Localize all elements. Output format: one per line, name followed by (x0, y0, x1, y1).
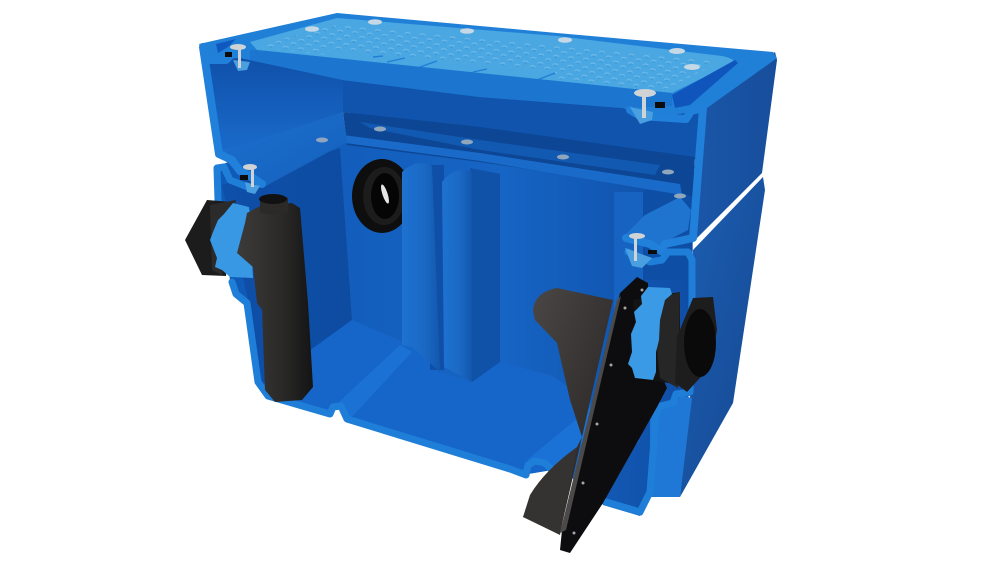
back wall (218, 135, 693, 516)
left interior wall (222, 148, 352, 385)
lower right outer wall (680, 177, 765, 497)
lid top band (199, 13, 777, 118)
lid fixings (225, 19, 700, 268)
right side pocket (650, 395, 692, 497)
column right flank (470, 168, 500, 382)
ledge left (217, 112, 347, 188)
lower shell cut edge (217, 167, 692, 512)
column left (402, 163, 440, 372)
right inner pier (614, 192, 643, 312)
upper back wall (343, 68, 706, 160)
clips (225, 52, 665, 254)
left floor trough (338, 345, 412, 420)
ledge right (623, 197, 691, 253)
lid screws (305, 19, 700, 70)
dimple pattern (262, 24, 720, 90)
lid plate (199, 13, 777, 118)
baffle columns (402, 163, 500, 382)
left slot (216, 39, 236, 53)
pipe stub (260, 195, 288, 215)
right floor trough (527, 408, 606, 470)
upper right outer wall (692, 52, 777, 243)
right baffle fitting (523, 277, 717, 553)
upper left wall (205, 52, 343, 153)
ledge channel (343, 112, 695, 197)
upper interior (205, 52, 706, 253)
dark gasket (210, 200, 236, 275)
fixing bolts (230, 44, 656, 261)
embossed name band (328, 50, 555, 85)
ledge front strip (343, 135, 682, 195)
dark gasket (656, 292, 680, 388)
left outlet fitting (185, 194, 313, 402)
blue lock ring (210, 203, 253, 278)
blue lock ring (628, 287, 672, 380)
elbow pipe (237, 203, 313, 402)
ledge inner rib (360, 122, 660, 175)
column right (442, 170, 472, 382)
funnel body (523, 288, 613, 533)
right slot (672, 60, 738, 108)
interior floor (262, 320, 640, 490)
hex nut (675, 297, 717, 392)
fitting body (633, 292, 680, 385)
fixing screws (572, 288, 644, 534)
ledge screws (316, 126, 686, 198)
hex nut (185, 200, 232, 276)
upper shell cut edge (203, 47, 703, 251)
plate edge (560, 296, 621, 533)
blue tabs (233, 60, 653, 268)
black inlet grommet (352, 159, 412, 233)
black baffle plate (560, 277, 667, 553)
lower interior (218, 135, 693, 516)
lid front strip (250, 50, 672, 108)
lid plate surface (250, 18, 735, 93)
